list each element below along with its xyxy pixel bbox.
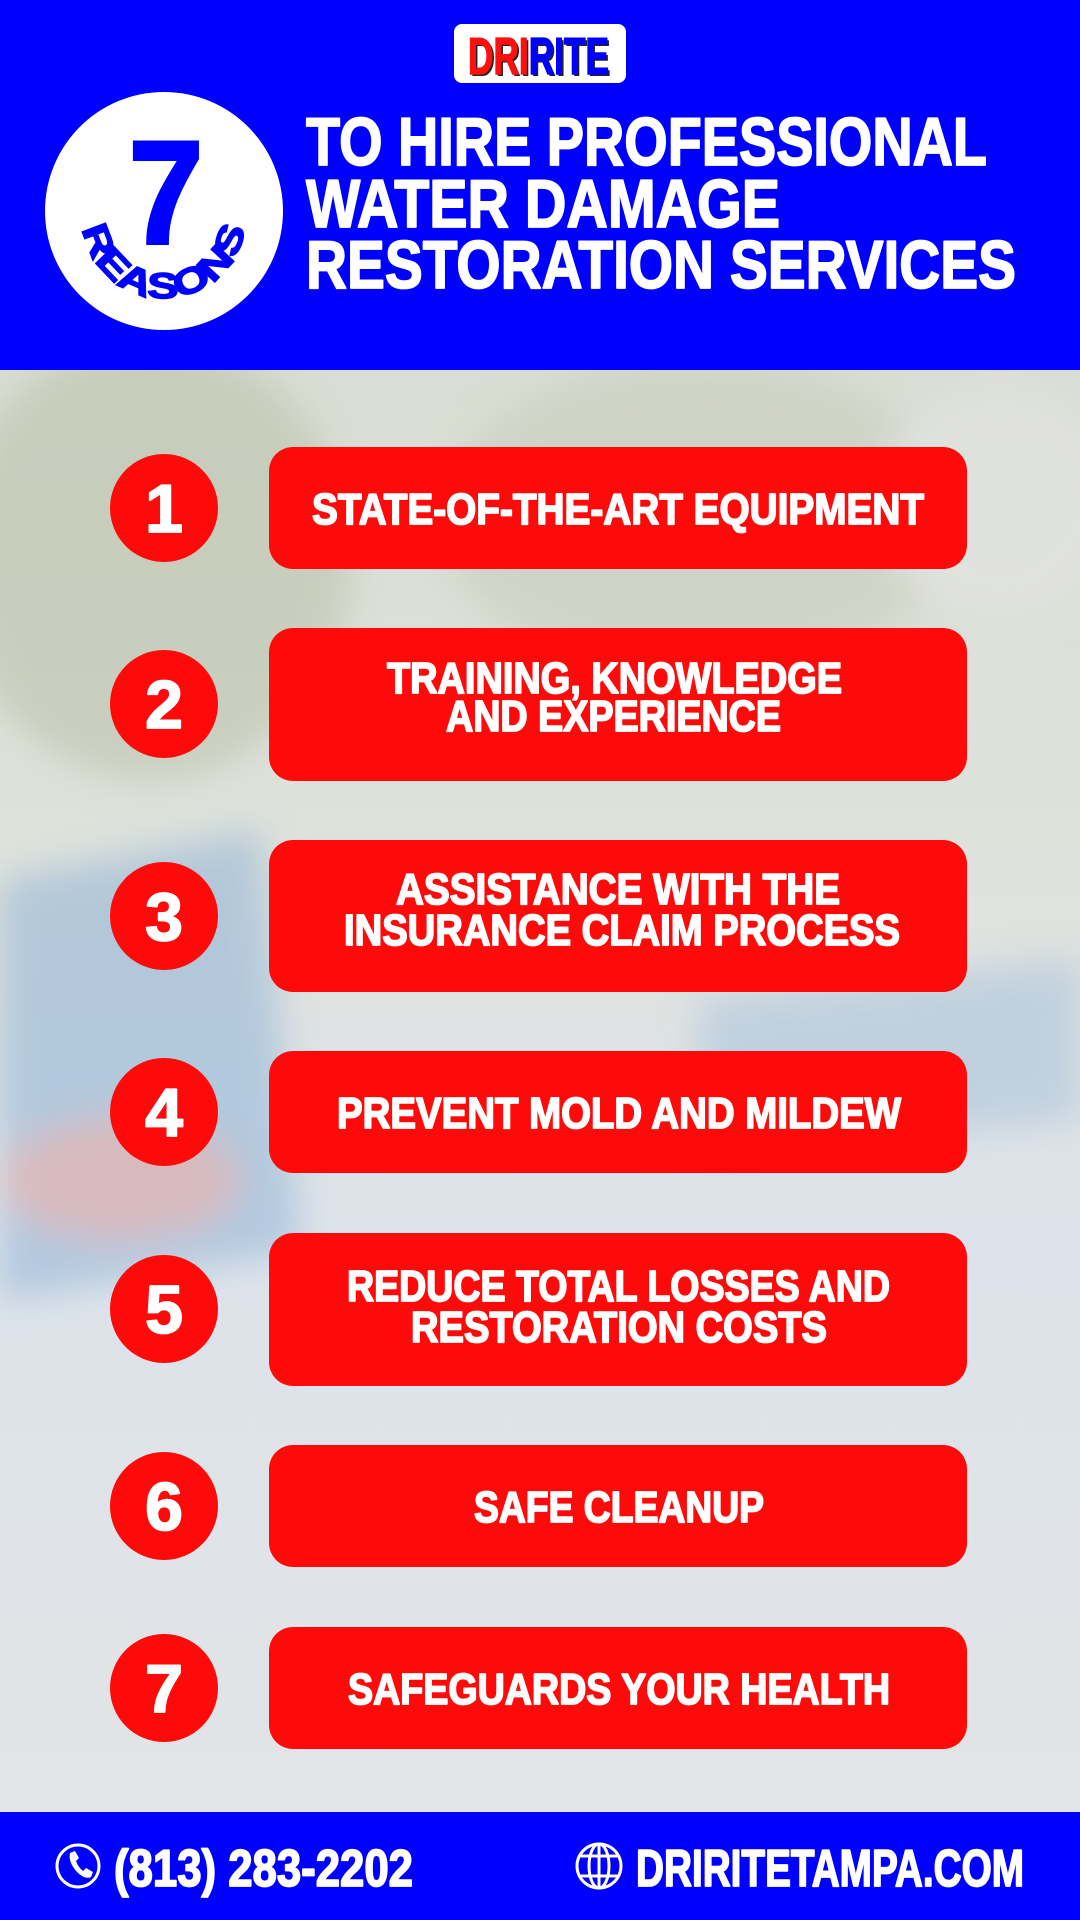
reason 1	[110, 447, 967, 569]
reason 2: 2	[145, 667, 183, 743]
reason 4: PREVENT MOLD AND MILDEW	[337, 1089, 901, 1138]
reason 5: REDUCE TOTAL LOSSES AND	[347, 1262, 890, 1311]
reason 6	[110, 1445, 967, 1567]
reason 4	[110, 1051, 967, 1173]
badge: 7 reasons	[45, 92, 283, 330]
reason 3	[110, 840, 967, 992]
header band	[0, 0, 1080, 370]
logo: DRIRITE	[470, 30, 611, 88]
reason 1: STATE-OF-THE-ART EQUIPMENT	[312, 485, 924, 534]
icon: globe	[577, 1844, 621, 1888]
reason 3: ASSISTANCE WITH THE	[396, 865, 840, 914]
reason 7: 7	[145, 1651, 183, 1727]
reason 2	[110, 628, 967, 781]
title	[306, 104, 1016, 303]
reason 7: SAFEGUARDS YOUR HEALTH	[348, 1665, 890, 1714]
reason 3: 3	[145, 879, 183, 955]
badge: 7 reasons: REASONS	[81, 222, 244, 300]
reason 1: 1	[145, 471, 183, 547]
logo: DRIRITE	[468, 28, 609, 86]
reason 6: 6	[145, 1469, 183, 1545]
reason 2: TRAINING, KNOWLEDGE	[387, 654, 842, 703]
background photo (faded)	[0, 340, 1080, 1812]
reason 2: AND EXPERIENCE	[446, 692, 781, 741]
badge: 7 reasons: 7	[129, 111, 203, 274]
reason 4: 4	[145, 1075, 183, 1151]
reason 5: RESTORATION COSTS	[411, 1303, 827, 1352]
reason 7	[110, 1627, 967, 1749]
phone number: (813) 283-2202	[114, 1840, 413, 1898]
reason 6: SAFE CLEANUP	[474, 1483, 764, 1532]
icon: phone	[57, 1845, 99, 1887]
reason 5	[110, 1233, 967, 1386]
reason 5: 5	[145, 1272, 183, 1348]
footer band	[0, 1812, 1080, 1920]
reason 3: INSURANCE CLAIM PROCESS	[344, 906, 900, 955]
title: WATER DAMAGE	[306, 166, 780, 242]
